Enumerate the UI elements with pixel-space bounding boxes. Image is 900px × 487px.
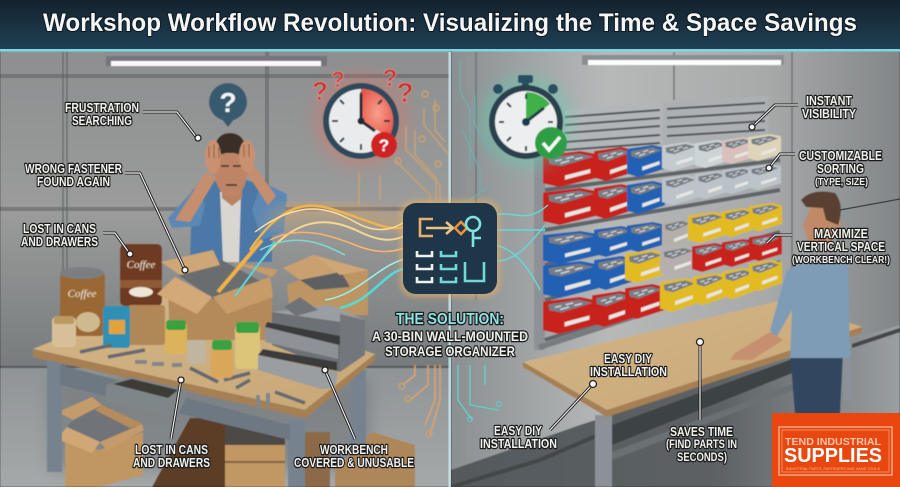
icon: red question marks: ? (312, 76, 328, 106)
right floor (451, 325, 900, 487)
label: lost in cans lower: AND DRAWERS (133, 456, 210, 470)
label: lost in cans upper (21, 222, 98, 249)
label: workbench covered: COVERED & UNUSABLE (294, 456, 414, 470)
label: customizable sorting: CUSTOMIZABLE (799, 149, 882, 163)
coffee cans, tins and jars: Coffee (127, 259, 155, 271)
label: easy diy lower: INSTALLATION (480, 437, 557, 451)
icon: question speech bubble (209, 83, 247, 127)
label: lost in cans lower: LOST IN CANS (135, 443, 208, 457)
label: frustration searching: FRUSTRATION (65, 101, 139, 115)
metal drawer unit (258, 297, 365, 389)
solution heading: THE SOLUTION: (396, 311, 504, 328)
under-desk boxes (57, 397, 415, 487)
label: instant visibility: INSTANT (806, 94, 852, 108)
label: easy diy lower (480, 424, 557, 451)
label: easy diy upper: EASY DIY (604, 352, 653, 366)
open drawer under bench (106, 377, 190, 418)
label: wrong fastener (25, 162, 122, 189)
right panel: organized workshop (451, 50, 900, 487)
solution heading: STORAGE ORGANIZER (385, 343, 515, 359)
label: frustration searching: SEARCHING (72, 114, 132, 128)
label: saves time: (FIND PARTS IN (666, 439, 737, 451)
label: lost in cans upper: AND DRAWERS (21, 235, 98, 249)
left floor (0, 367, 450, 487)
30-bin organizer (543, 134, 782, 334)
icon: red question marks: ? (331, 67, 345, 92)
jars on the bench (165, 320, 260, 378)
central divider line (448, 52, 451, 487)
solution heading (372, 311, 528, 359)
logo: Tend Industrial Supplies: SUPPLIES (784, 445, 882, 467)
label: lost in cans upper: LOST IN CANS (23, 222, 96, 236)
label: saves time (666, 425, 737, 464)
ceiling light right (582, 55, 784, 65)
coffee cans, tins and jars (52, 244, 305, 409)
label: instant visibility (802, 94, 857, 121)
cardboard box on the right (283, 255, 368, 315)
logo: Tend Industrial Supplies: TEND INDUSTRIAL (785, 437, 881, 448)
man by the workbench (730, 192, 850, 414)
leader lines and dots (103, 105, 900, 439)
coffee cans, tins and jars: Coffee (68, 288, 96, 300)
label: wrong fastener: WRONG FASTENER (25, 162, 122, 176)
label: saves time: SAVES TIME (670, 425, 733, 439)
solution heading: A 30-BIN WALL-MOUNTED (372, 328, 528, 344)
icon: red time-lost clock (315, 74, 407, 166)
left wall (0, 50, 450, 370)
label: customizable sorting: SORTING (817, 162, 864, 176)
label: lost in cans lower (133, 443, 210, 470)
circuit traces left (359, 91, 449, 437)
label: easy diy upper (590, 352, 667, 379)
label: easy diy upper: INSTALLATION (590, 365, 667, 379)
label: saves time: SECONDS) (677, 452, 727, 464)
logo: Tend Industrial Supplies: INDUSTRIAL PARTS, FASTENERS AND HAND TOOLS (786, 466, 880, 471)
workbench right (523, 300, 862, 487)
header bar (0, 0, 900, 52)
label: maximize vertical space: MAXIMIZE (814, 227, 868, 241)
frustrated man (168, 133, 287, 262)
label: customizable sorting: (TYPE, SIZE) (815, 176, 868, 188)
workbench left (33, 290, 375, 487)
ceiling light left (106, 56, 327, 66)
label: frustration searching (65, 101, 139, 128)
label: wrong fastener: FOUND AGAIN (37, 175, 110, 189)
central solution icon (400, 200, 500, 297)
pegboard slats (565, 96, 768, 160)
label: instant visibility: VISIBILITY (802, 107, 857, 121)
bin rack frame (534, 155, 780, 350)
label: maximize vertical space (792, 227, 890, 266)
left panel: cluttered workshop (0, 50, 450, 487)
label: customizable sorting (799, 149, 882, 188)
icon: question speech bubble: ? (219, 87, 237, 118)
label: workbench covered: WORKBENCH (320, 443, 388, 457)
energy flow lines through the centre (218, 60, 548, 422)
icon: red question marks (312, 65, 414, 108)
icon: green stopwatch (480, 75, 572, 168)
icon: red time-lost clock: ? (379, 136, 389, 155)
open cardboard box of fasteners (157, 250, 278, 340)
icon: red question marks: ? (396, 77, 414, 108)
right wall (451, 50, 900, 487)
label: easy diy lower: EASY DIY (494, 424, 543, 438)
title: Workshop Workflow Revolution: Visualizing the Time & Space Savings (43, 9, 857, 37)
label: workbench covered (294, 443, 414, 470)
under-desk shadow (50, 380, 370, 470)
icon: red question marks: ? (383, 65, 397, 92)
logo: Tend Industrial Supplies (772, 413, 900, 487)
